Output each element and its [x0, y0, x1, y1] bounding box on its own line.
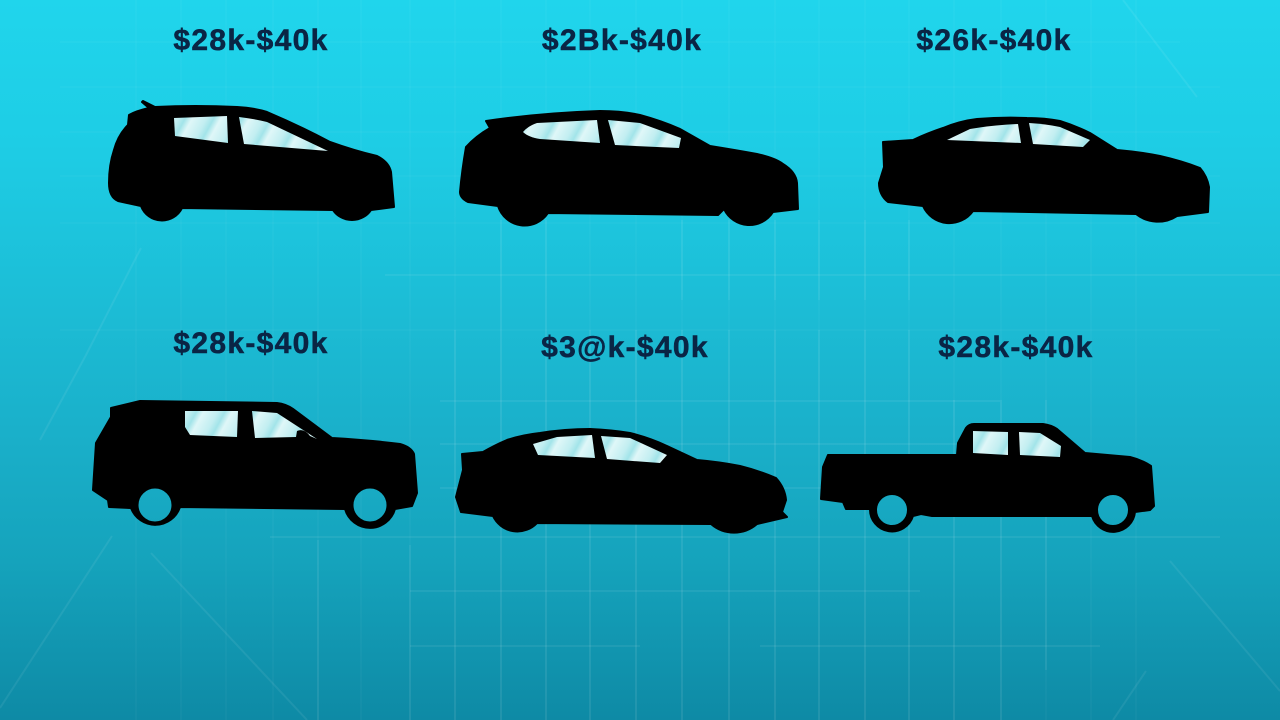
car silhouette: [879, 118, 1209, 223]
front window: [608, 120, 681, 148]
front window: [601, 436, 667, 463]
car silhouette: [109, 101, 394, 220]
rear window: [174, 116, 228, 143]
rear window: [523, 120, 600, 143]
car silhouette: [460, 111, 798, 226]
panel: fastback: [456, 331, 787, 533]
front window: [239, 117, 328, 151]
front window: [1019, 432, 1061, 457]
front window: [252, 411, 317, 439]
price label: $2Bk-$40k: [542, 24, 702, 57]
car silhouette with open wheels: [93, 401, 417, 528]
rear window: [533, 435, 595, 458]
price label: $3@k-$40k: [541, 331, 709, 364]
price label: $28k-$40k: [173, 327, 329, 360]
rear window: [947, 124, 1021, 143]
panel: hatchback: [109, 24, 394, 220]
panel: pickup truck: [821, 331, 1154, 532]
car silhouette: [456, 429, 787, 533]
front window: [1029, 123, 1090, 147]
rear window: [973, 431, 1008, 455]
price label: $26k-$40k: [916, 24, 1072, 57]
panel: crossover: [460, 24, 798, 226]
rear window: [185, 411, 238, 437]
price label: $28k-$40k: [173, 24, 329, 57]
price label: $28k-$40k: [938, 331, 1094, 364]
truck silhouette with open wheels: [821, 424, 1154, 532]
panel: SUV: [93, 327, 417, 528]
panel: sedan: [879, 24, 1209, 223]
